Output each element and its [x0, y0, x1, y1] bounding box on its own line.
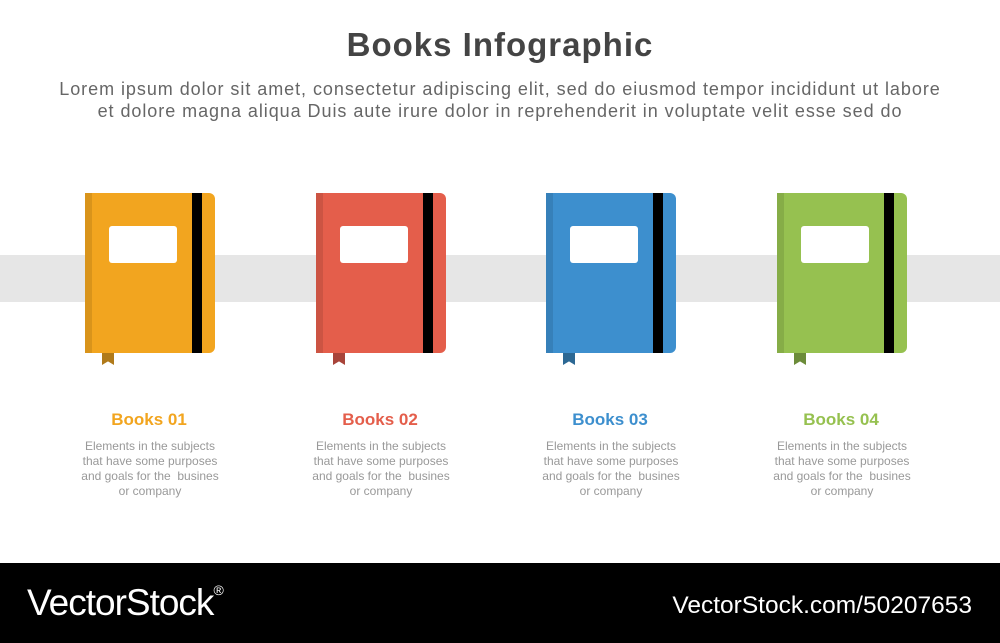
book 1 — [85, 193, 215, 353]
book 3 — [546, 193, 676, 353]
text 2: and goals for the busines — [312, 469, 450, 483]
text 3: Elements in the subjects — [546, 439, 676, 453]
subtitle: Lorem ipsum dolor sit amet, consectetur adipiscing elit, sed do eiusmod tempor incididunt ut labore — [59, 79, 941, 99]
heading 1: Books 01 — [111, 410, 187, 429]
text 3 — [542, 439, 680, 498]
title: Books Infographic — [347, 26, 653, 63]
book 2 — [316, 193, 446, 353]
footer — [0, 563, 1000, 643]
subtitle: et dolore magna aliqua Duis aute irure dolor in reprehenderit in voluptate velit esse sed do — [98, 101, 902, 121]
footer: VectorStock.com/50207653 — [672, 592, 972, 619]
heading 2: Books 02 — [342, 410, 418, 429]
heading 3: Books 03 — [572, 410, 648, 429]
text 2 — [312, 439, 450, 498]
text 1: Elements in the subjects — [85, 439, 215, 453]
text 2: that have some purposes — [314, 454, 448, 468]
text 2: or company — [350, 484, 412, 498]
text 3: and goals for the busines — [542, 469, 680, 483]
text 4: and goals for the busines — [773, 469, 911, 483]
text 4: that have some purposes — [775, 454, 909, 468]
book 4 — [777, 193, 907, 353]
text 4: or company — [811, 484, 873, 498]
text 1 — [81, 439, 219, 498]
subtitle — [59, 79, 941, 121]
text 2: Elements in the subjects — [316, 439, 446, 453]
text 1: and goals for the busines — [81, 469, 219, 483]
heading 4: Books 04 — [803, 410, 879, 429]
text 1: that have some purposes — [83, 454, 217, 468]
footer: VectorStock® — [27, 582, 223, 623]
text 3: that have some purposes — [544, 454, 678, 468]
text 4: Elements in the subjects — [777, 439, 907, 453]
text 1: or company — [119, 484, 181, 498]
gray band — [0, 255, 1000, 302]
text 4 — [773, 439, 911, 498]
text 3: or company — [580, 484, 642, 498]
